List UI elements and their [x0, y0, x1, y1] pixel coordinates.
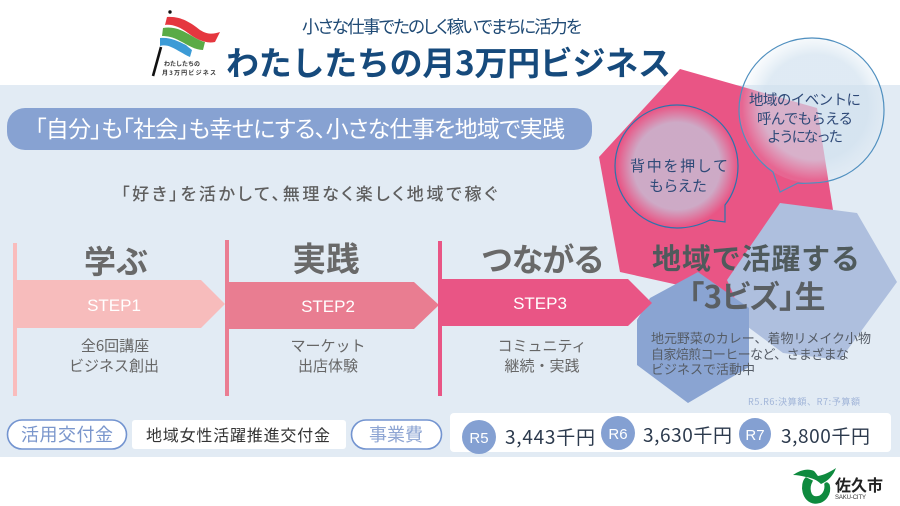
R7 budget: R7 [745, 427, 765, 444]
step 2: 実践 [292, 232, 360, 281]
subtitle: 小さな仕事でたのしく稼いでまちに活力を [302, 14, 582, 39]
budget note: R5.R6:決算額、R7:予算額 [748, 395, 860, 408]
logo: rainbow flag [153, 10, 220, 77]
step 1: ビジネス創出 [69, 355, 159, 376]
background band [0, 85, 900, 457]
step 3: 継続・実践 [504, 355, 580, 376]
label: grant [8, 420, 126, 449]
grant name: 地域女性活躍推進交付金 [146, 422, 330, 446]
step 3: コミュニティ [497, 335, 587, 356]
light blue hexagon [727, 203, 897, 360]
R6 budget: R6 [608, 426, 628, 443]
speech bubble: invited: 地域のイベントに [749, 89, 861, 110]
R6 budget: 3,630千円 [643, 421, 732, 448]
description: 地元野菜のカレー、着物リメイク小物 [651, 328, 871, 347]
main title: わたしたちの月3万円ビジネス [226, 37, 671, 85]
step 1: 学ぶ [84, 237, 148, 283]
step 3: つながる [481, 235, 605, 281]
step 2: マーケット [290, 335, 366, 356]
description [651, 328, 871, 378]
logo: Saku City: 佐久市 [835, 472, 883, 496]
R5 budget: R5 [469, 430, 489, 447]
tagline: 「好き」を活かして、無理なく楽しく地域で稼ぐ [121, 180, 497, 205]
description: ビジネスで活動中 [651, 359, 755, 378]
step 3 [438, 235, 652, 396]
step 2 [225, 232, 439, 396]
heading: active in the community: 地域で活躍する [652, 236, 860, 278]
speech bubble: encouraged: 背中を押して [630, 155, 728, 176]
step 2: STEP2 [301, 297, 355, 316]
R5 budget [462, 420, 595, 454]
R6 budget [601, 416, 732, 450]
R7 budget [739, 418, 870, 450]
speech bubble: invited [739, 37, 885, 192]
label: project cost [352, 420, 442, 449]
label: project cost: 事業費 [369, 421, 423, 447]
logo: rainbow flag: わたしたちの [164, 59, 200, 68]
logo: Saku City: SAKU-CITY [835, 495, 866, 501]
logo: Saku City [793, 468, 883, 503]
description: 自家焙煎コーヒーなど、さまざまな [651, 344, 849, 363]
step 3: STEP3 [513, 294, 567, 313]
logo: rainbow flag: 月3万円ビジネス [162, 68, 216, 77]
banner pill: 「自分」も「社会」も幸せにする、小さな仕事を地域で実践 [35, 110, 565, 144]
label: grant: 活用交付金 [21, 421, 113, 447]
speech bubble: invited: ようになった [767, 126, 843, 147]
R5 budget: 3,443千円 [505, 423, 595, 450]
speech bubble: encouraged [615, 104, 739, 228]
step 1: STEP1 [87, 296, 141, 315]
step 1: 全6回講座 [81, 335, 149, 356]
step 1 [13, 237, 225, 396]
budget panel [450, 413, 891, 454]
step 2: 出店体験 [298, 355, 358, 376]
heading: active in the community [652, 236, 860, 317]
dark blue hexagon [637, 272, 749, 403]
speech bubble: encouraged: もらえた [649, 175, 707, 196]
R7 budget: 3,800千円 [781, 422, 870, 449]
speech bubble: invited: 呼んでもらえる [757, 108, 853, 129]
heading: active in the community: 「3ビズ」生 [688, 272, 826, 317]
pink polygon [599, 69, 833, 298]
